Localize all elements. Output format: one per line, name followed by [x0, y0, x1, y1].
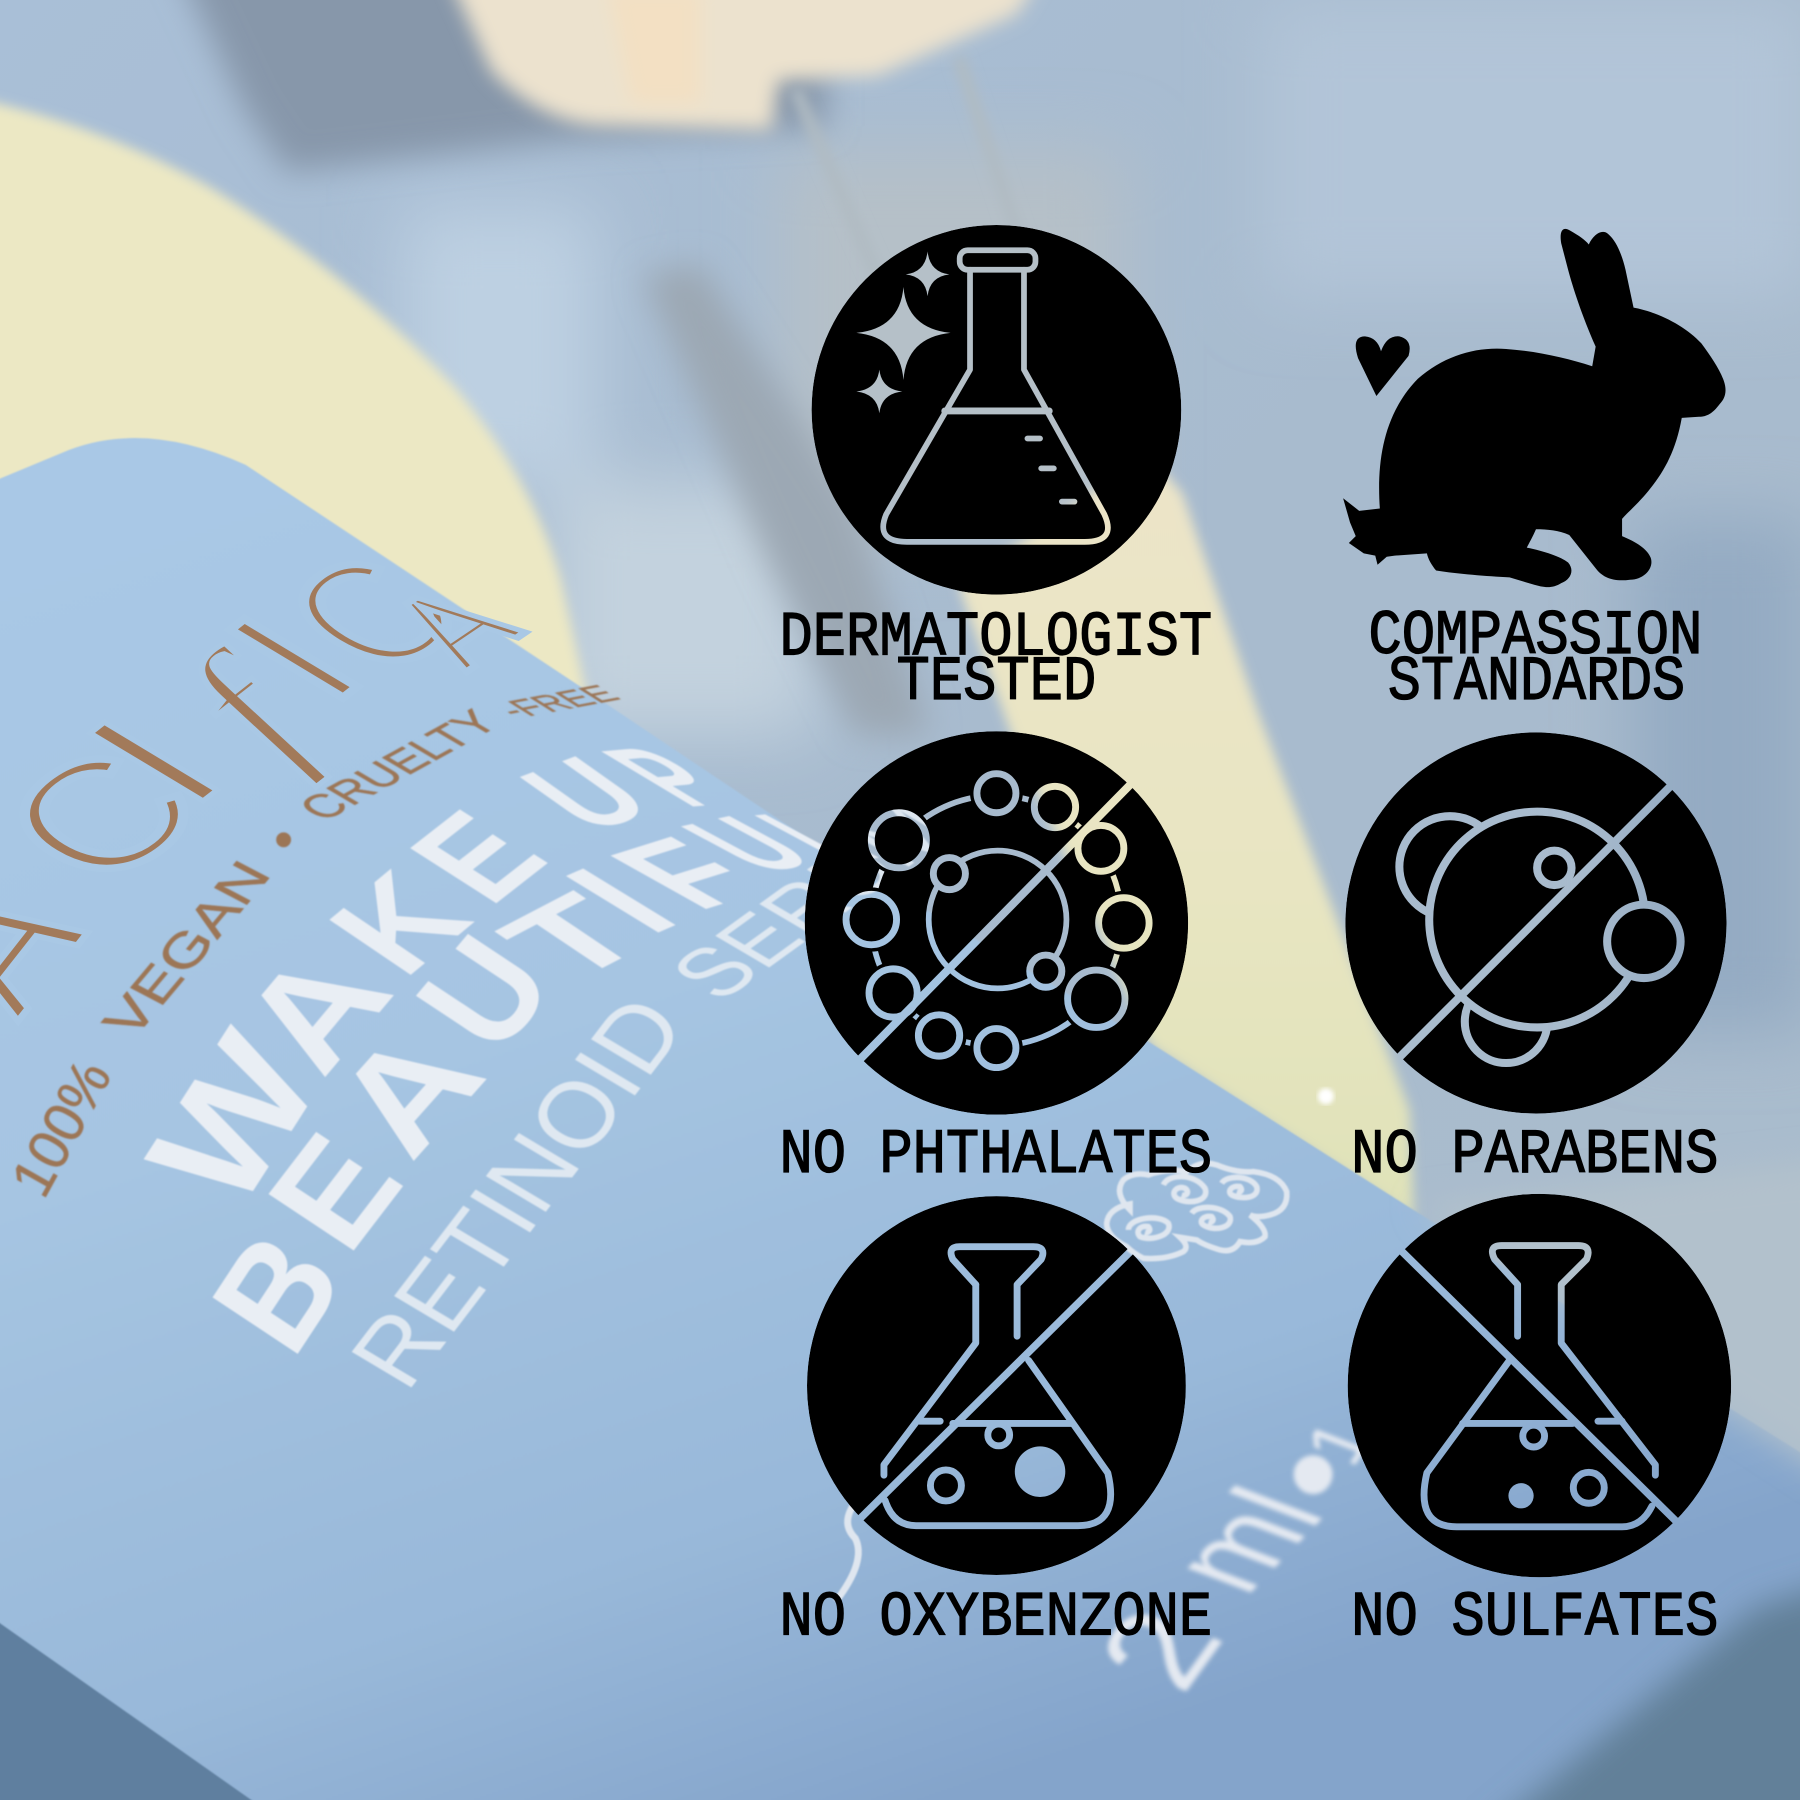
- BEAUTIFUL: U: [385, 911, 586, 1076]
- WAKE UP: [115, 730, 771, 1235]
- volume text on label: •: [1288, 1393, 1338, 1553]
- icon: rabbit and heart: [1343, 229, 1726, 587]
- badge: no parabens: [1345, 732, 1727, 1191]
- WAKE UP: E: [378, 788, 579, 925]
- label: no oxybenzone: NO OXYBENZONE: [779, 1582, 1212, 1654]
- tagline on label: 100%: [0, 1050, 124, 1207]
- highlight on wedge: [1318, 1088, 1334, 1104]
- soft grey area on right of label: [1418, 1159, 1800, 1481]
- blue serum label: [0, 438, 1800, 1800]
- BEAUTIFUL: T: [468, 873, 677, 1001]
- label: compassion standards: [1368, 600, 1702, 718]
- RETINOID SERUM: [328, 790, 976, 1405]
- WAKE UP: W: [115, 1005, 353, 1235]
- yellow bottle left: [0, 99, 588, 700]
- icon: crossed-out molecule ring: [805, 731, 1188, 1115]
- BEAUTIFUL: B: [181, 1206, 374, 1379]
- label: compassion standards: COMPASSION: [1368, 600, 1702, 672]
- volume text on label: [1065, 1393, 1390, 1707]
- cork dropper cap: [449, 0, 1039, 130]
- BEAUTIFUL: I: [529, 847, 712, 954]
- label: dermatologist tested: DERMATOLOGIST: [779, 601, 1212, 673]
- brand name in copper foil: A: [355, 565, 552, 688]
- label: no phthalates: NO PHTHALATES: [779, 1119, 1212, 1191]
- BEAUTIFUL: L: [723, 797, 909, 877]
- glass pipette: [796, 57, 1022, 276]
- label: dermatologist tested: TESTED: [897, 646, 1096, 718]
- volume text on label: ml: [1138, 1472, 1353, 1608]
- WAKE UP: K: [297, 848, 501, 997]
- tagline on label: VEGAN: [91, 852, 283, 1046]
- label: no parabens: NO PARABENS: [1351, 1119, 1718, 1191]
- WAKE UP: U: [491, 738, 682, 851]
- badge: no phthalates: [779, 731, 1212, 1191]
- WAKE UP: P: [568, 730, 771, 824]
- volume text on label: 1: [1287, 1410, 1390, 1475]
- label: no sulfates: NO SULFATES: [1351, 1582, 1718, 1654]
- cloud logo on label: [836, 1163, 1287, 1601]
- BEAUTIFUL: A: [299, 1002, 517, 1182]
- tagline on label: [0, 680, 629, 1207]
- icon: crossed-out flask with bubbles: [807, 1196, 1186, 1575]
- brand name in copper foil: f: [131, 622, 377, 789]
- BEAUTIFUL: [181, 797, 909, 1379]
- BEAUTIFUL: U: [649, 801, 847, 888]
- badge: compassion standards: [1343, 229, 1726, 718]
- icon: crossed-out molecule: [1345, 732, 1727, 1114]
- product name on label: [115, 730, 976, 1405]
- tagline on label: -FREE: [487, 680, 629, 723]
- icon: crossed-out flask: [1348, 1194, 1731, 1577]
- BEAUTIFUL: E: [236, 1108, 434, 1276]
- volume text on label: 2: [1065, 1590, 1254, 1707]
- brand name in copper foil: [0, 527, 552, 1043]
- badge: dermatologist tested: [779, 225, 1212, 718]
- lower right dark surface: [1484, 1582, 1800, 1800]
- label: dermatologist tested: [779, 601, 1212, 718]
- yellow wedge: [959, 453, 1414, 1219]
- lower left dark surface: [0, 1615, 271, 1800]
- RETINOID SERUM: RETINOID: [328, 978, 707, 1405]
- badge: no sulfates: [1348, 1194, 1731, 1654]
- icon: flask with sparkles: [812, 225, 1181, 595]
- RETINOID SERUM: SERUM: [650, 790, 976, 1013]
- brand name in copper foil: C: [239, 527, 505, 702]
- dark shadow at top: [172, 0, 827, 172]
- tagline on label: CRUELTY: [287, 703, 510, 827]
- BEAUTIFUL: F: [574, 819, 801, 928]
- tagline on label: •: [274, 811, 293, 870]
- brand name in copper foil: I: [41, 690, 266, 833]
- brand name in copper foil: I: [181, 587, 406, 730]
- grey shadow streak behind first badge: [643, 264, 930, 735]
- label: compassion standards: STANDARDS: [1388, 646, 1685, 718]
- WAKE UP: A: [205, 925, 424, 1096]
- light backdrop zones: [402, 0, 1800, 1033]
- badge: no oxybenzone: [779, 1196, 1212, 1654]
